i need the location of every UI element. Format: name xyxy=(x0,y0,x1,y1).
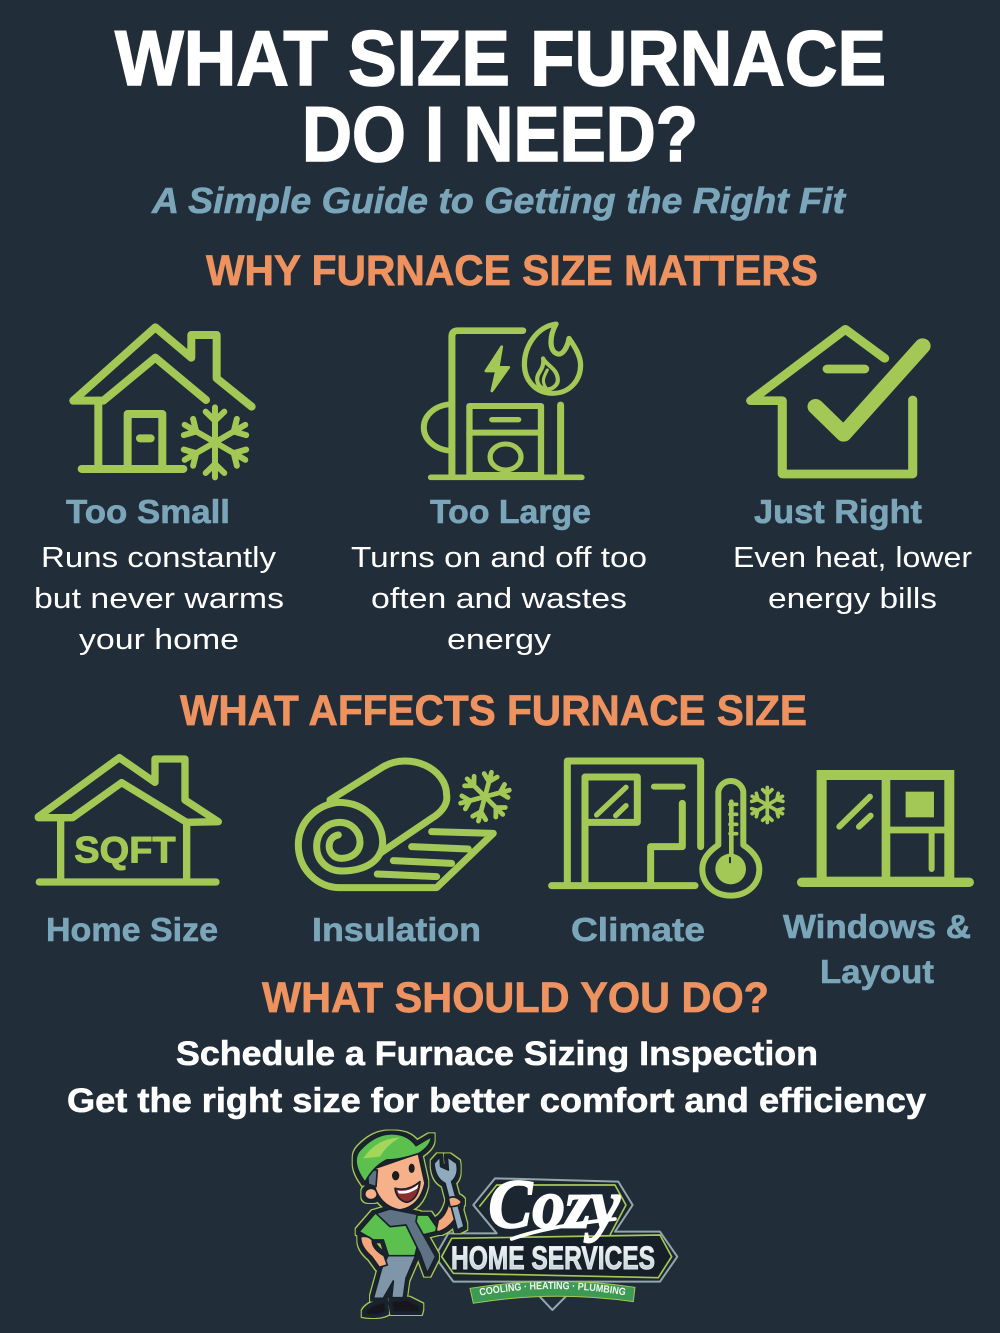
text block: just right: energy bills xyxy=(768,583,937,615)
label: windows and layout: Windows & xyxy=(783,908,971,945)
icon: house with check mark xyxy=(751,329,923,474)
heading: what should you do: WHAT SHOULD YOU DO? xyxy=(262,974,769,1022)
mascot xyxy=(356,1134,464,1315)
call to action: Get the right size for better comfort and efficiency xyxy=(67,1082,926,1120)
icon: home size sqft: SQFT xyxy=(74,829,176,871)
text block: too small: Runs constantly xyxy=(41,542,277,574)
call to action: Schedule a Furnace Sizing Inspection xyxy=(176,1035,818,1073)
title: DO I NEED? xyxy=(302,90,698,178)
icon: home size sqft xyxy=(38,758,218,882)
label: home size: Home Size xyxy=(46,911,218,948)
text block: too small: Too Small xyxy=(66,493,230,530)
logo badge xyxy=(435,1178,677,1310)
icon: house with snowflake xyxy=(73,327,252,477)
label: windows and layout: Layout xyxy=(820,953,934,990)
text block: too large: energy xyxy=(447,624,552,656)
logo banner xyxy=(470,1281,635,1303)
label: windows and layout xyxy=(783,908,971,990)
logo: cozy home services xyxy=(352,1130,678,1319)
heading: why furnace size matters: WHY FURNACE SIZE MATTERS xyxy=(206,247,818,295)
icon: floor plan with thermometer xyxy=(552,761,785,896)
icon: window layout xyxy=(802,775,969,882)
logo wordmark: cozy: Cozy xyxy=(488,1167,621,1244)
call to action xyxy=(67,1035,926,1120)
text block: too large: often and wastes xyxy=(371,583,627,615)
text block: just right: Even heat, lower xyxy=(733,542,972,574)
title xyxy=(115,14,886,178)
heading: what affects furnace size: WHAT AFFECTS FURNACE SIZE xyxy=(180,687,807,735)
text block: just right xyxy=(733,493,972,615)
icon: insulation roll xyxy=(298,761,516,888)
logo wordmark: home services: HOME SERVICES xyxy=(451,1240,655,1276)
text block: just right: Just Right xyxy=(754,493,922,530)
text block: too large: Turns on and off too xyxy=(351,542,647,574)
subtitle: A Simple Guide to Getting the Right Fit xyxy=(151,180,847,221)
label: insulation: Insulation xyxy=(312,911,481,948)
label: climate: Climate xyxy=(571,911,705,948)
logo: cozy home services: COOLING · HEATING · PLUMBING xyxy=(480,1282,626,1296)
text block: too large xyxy=(351,493,647,656)
text block: too small: but never warms xyxy=(34,583,284,615)
text block: too small xyxy=(34,493,284,656)
text block: too small: your home xyxy=(79,624,239,656)
title: WHAT SIZE FURNACE xyxy=(115,14,886,102)
icon: furnace with flame xyxy=(424,324,582,477)
text block: too large: Too Large xyxy=(430,493,591,530)
